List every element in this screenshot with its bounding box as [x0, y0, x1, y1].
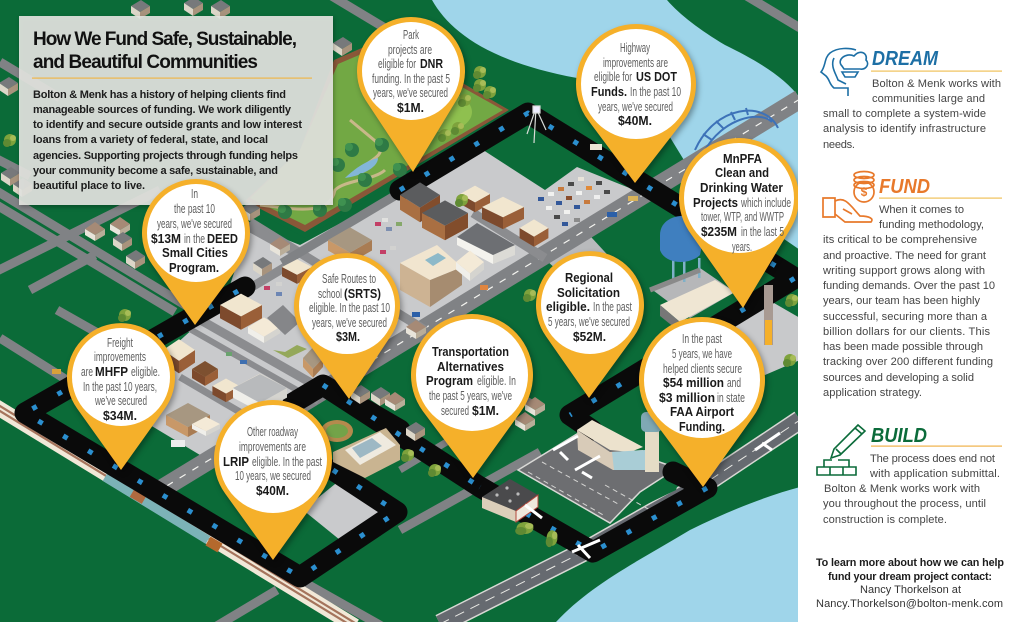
pin: MnPFA: which include — [740, 195, 791, 210]
text: fund: and proactive. The need for grant — [823, 250, 986, 262]
intro title — [33, 29, 297, 73]
pin: Freight MHFP: improvements — [94, 349, 146, 364]
text: fund: successful, securing more than a — [823, 311, 988, 323]
pin: Regional Solicitation: eligible. — [546, 300, 590, 314]
parked cars — [52, 144, 638, 447]
text: dream: Bolton & Menk works with — [872, 78, 1001, 90]
text: dream: needs. — [823, 139, 855, 151]
pin: Transportation Alternatives: Program — [426, 374, 473, 388]
pin: Transportation Alternatives — [411, 314, 533, 478]
pin: Highway US DOT: US DOT — [636, 70, 677, 84]
pin: SRTS — [294, 253, 400, 399]
map background — [0, 0, 800, 622]
pin: DEED Small Cities: the past 10 — [174, 201, 215, 216]
intro text: your community become a safe, sustainable, and — [33, 165, 278, 177]
pin: MnPFA: Projects — [693, 196, 738, 210]
panel: intro — [19, 16, 333, 205]
text: build: with application submittal. — [869, 468, 1000, 480]
contact: To learn more about how we can help — [816, 557, 1004, 569]
text: fund: tracking over 200 different funding — [823, 356, 993, 368]
contact: Nancy Thorkelson at — [860, 584, 961, 596]
text: fund: its critical to be comprehensive — [823, 234, 977, 246]
contact: fund your dream project contact: — [828, 571, 992, 583]
pin: MnPFA: Clean and — [715, 166, 769, 180]
pin: Freight MHFP: are — [81, 364, 93, 379]
school — [321, 420, 400, 478]
railway — [0, 403, 355, 622]
radio tower — [527, 106, 546, 143]
pin: Freight MHFP: we've secured — [94, 393, 147, 408]
water tower — [660, 216, 705, 282]
pin: Regional Solicitation: $52M. — [573, 330, 606, 344]
airport apron — [518, 434, 677, 523]
pin: Park DNR: years, we've secured — [373, 85, 448, 100]
runway — [440, 420, 800, 622]
pin: Freight MHFP: MHFP — [95, 365, 128, 379]
pin: Park DNR: DNR — [420, 57, 443, 71]
pin: SRTS: $3M. — [336, 330, 360, 344]
pin: DEED Small Cities: in the — [184, 231, 205, 246]
pin: MnPFA: $235M — [701, 225, 737, 239]
pin: MnPFA: MnPFA — [723, 152, 762, 166]
pin: SRTS: school — [318, 286, 342, 301]
pin: SRTS: eligible. In the past 10 — [309, 300, 390, 315]
intro text: loans from a variety of federal, state, and local — [33, 134, 268, 146]
pin: Highway US DOT: In the past 10 — [630, 84, 681, 99]
river top — [432, 0, 800, 250]
pin: Park DNR: funding. In the past 5 — [372, 71, 450, 86]
pin: MnPFA: Drinking Water — [700, 181, 783, 195]
pin: LRIP: Other roadway — [247, 424, 298, 439]
pin: Highway US DOT: eligible for — [594, 69, 632, 84]
text: fund — [822, 204, 995, 399]
text: fund: sources and developing a solid — [823, 372, 974, 384]
contact — [816, 557, 1004, 610]
pin: SRTS: Safe Routes to — [322, 271, 376, 286]
pin: Transportation Alternatives: $1M. — [472, 404, 499, 418]
right panel: $ — [861, 185, 868, 199]
airport hangar — [482, 479, 538, 522]
pin: Highway US DOT: improvements are — [603, 55, 668, 70]
pin: LRIP: LRIP — [223, 455, 249, 469]
text: fund: funding methodology, — [879, 219, 984, 231]
planes — [525, 433, 780, 558]
text: fund: application strategy. — [823, 387, 922, 399]
pin: Freight MHFP — [67, 323, 175, 470]
pin: Highway US DOT: Highway — [620, 40, 650, 55]
pin: FAA Airport: $54 million — [663, 376, 724, 390]
pin: SRTS: (SRTS) — [344, 287, 381, 301]
heading: dream: DREAM — [872, 48, 939, 70]
intro text: agencies. Supporting projects through funding helps — [33, 150, 298, 162]
text: build — [823, 453, 1000, 526]
pin: MnPFA: years. — [732, 239, 752, 254]
pin: Transportation Alternatives: secured — [441, 403, 469, 418]
intro text — [33, 89, 302, 192]
pin: FAA Airport: and — [727, 375, 741, 390]
pin: Regional Solicitation: In the past — [593, 299, 632, 314]
pin: Highway US DOT: Funds. — [591, 85, 627, 99]
light grey area right — [700, 295, 800, 375]
contact: Nancy.Thorkelson@bolton-menk.com — [816, 598, 1003, 610]
houses and trees — [0, 0, 798, 477]
pin: Park DNR — [357, 17, 465, 172]
text: build: you throughout the process, until — [823, 498, 986, 510]
pin: Transportation Alternatives: eligible. In — [477, 373, 516, 388]
text: fund: funding demands. Over the past 10 — [823, 280, 995, 292]
text: fund: years, our team has been highly — [823, 295, 980, 307]
pin: FAA Airport: Funding. — [679, 420, 725, 434]
pin: Regional Solicitation: Solicitation — [557, 286, 620, 300]
pin: Park DNR: eligible for — [378, 56, 416, 71]
text: dream: communities large and — [872, 93, 985, 105]
pin: DEED Small Cities: DEED — [207, 232, 238, 246]
pin: LRIP: $40M. — [256, 484, 289, 498]
pin: FAA Airport: $3 million — [659, 391, 715, 405]
intro text: beautiful place to live. — [33, 180, 145, 192]
heading: fund: FUND — [879, 176, 930, 198]
pin: Regional Solicitation: Regional — [565, 271, 613, 285]
pin: MnPFA: tower, WTP, and WWTP — [701, 209, 784, 224]
pin: Freight MHFP: eligible. — [131, 364, 160, 379]
river bottom — [556, 487, 800, 622]
intro title: How We Fund Safe, Sustainable, — [33, 29, 297, 50]
airport terminal — [577, 412, 662, 472]
pin: FAA Airport: helped clients secure — [663, 361, 742, 376]
pin: Park DNR: Park — [403, 27, 419, 42]
text: fund: has been made possible through — [823, 341, 983, 353]
text: fund: When it comes to — [879, 204, 964, 216]
pin: Regional Solicitation: 5 years, we've secured — [548, 314, 630, 329]
pin: LRIP: improvements are — [239, 439, 306, 454]
text: build: Bolton & Menk works work with — [824, 483, 980, 495]
school lot — [303, 480, 387, 540]
pin: LRIP — [214, 400, 332, 560]
pin: DEED Small Cities: In — [191, 186, 198, 201]
intro text: manageable sources of funding. We work diligently — [33, 104, 292, 116]
pin: DEED Small Cities: $13M — [151, 232, 181, 246]
pin: FAA Airport: 5 years, we have — [672, 346, 732, 361]
text: fund: writing support grows along with — [822, 265, 985, 277]
city block — [150, 148, 652, 455]
main avenue — [160, 99, 800, 490]
pin: LRIP: 10 years, we secured — [235, 468, 311, 483]
pin: DEED Small Cities: Small Cities — [162, 246, 228, 260]
pin: Park DNR: projects are — [388, 42, 432, 57]
pin: Highway US DOT — [576, 24, 696, 183]
pin: Park DNR: $1M. — [397, 101, 424, 115]
text: dream: analysis to identify infrastructure — [823, 123, 986, 135]
pin: FAA Airport: FAA Airport — [670, 405, 735, 419]
bridge — [695, 108, 778, 152]
text: fund: billion dollars for our clients. This — [823, 326, 990, 338]
pin: Freight MHFP: In the past 10 years, — [83, 379, 157, 394]
road network — [0, 0, 800, 622]
pin: Freight MHFP: Freight — [107, 335, 133, 350]
industrial building — [650, 270, 735, 332]
intro text: Bolton & Menk has a history of helping clients find — [33, 89, 286, 101]
pin: Regional Solicitation — [536, 251, 644, 398]
heading: build: BUILD — [871, 425, 927, 447]
pin: DEED Small Cities — [142, 179, 250, 325]
text: build: construction is complete. — [823, 514, 947, 526]
silo — [764, 285, 773, 345]
icon: head with cloud — [821, 48, 868, 96]
pin: Transportation Alternatives: the past 5 years, we've — [429, 388, 512, 403]
pin: LRIP: eligible. In the past — [252, 454, 322, 469]
buildings — [163, 182, 780, 558]
city streets — [180, 213, 545, 415]
pin: Freight MHFP: $34M. — [103, 409, 137, 423]
pin: MnPFA — [679, 138, 799, 308]
pin: FAA Airport: in state — [717, 390, 745, 405]
text: dream: small to complete a system-wide — [823, 108, 986, 120]
text: build: The process does end not — [870, 453, 995, 465]
black route — [25, 113, 795, 577]
pin: DEED Small Cities: years, we've secured — [157, 216, 232, 231]
icon: pencil and bricks — [817, 425, 865, 475]
intro text: to identify and secure outside grants and low interest — [33, 119, 302, 131]
park — [240, 33, 513, 238]
right panel — [798, 0, 1024, 622]
pin: Transportation Alternatives: Alternatives — [437, 360, 504, 374]
icon: hand with coins — [823, 172, 874, 222]
pin: MnPFA: in the last 5 — [741, 224, 784, 239]
pin: Transportation Alternatives: Transportation — [432, 345, 509, 359]
pin: Highway US DOT: $40M. — [618, 114, 652, 128]
pin: FAA Airport — [639, 317, 765, 487]
intro title: and Beautiful Communities — [33, 52, 258, 73]
text: dream — [823, 78, 1001, 151]
pin: SRTS: years, we've secured — [312, 315, 387, 330]
pin: DEED Small Cities: Program. — [169, 261, 219, 275]
pin: FAA Airport: In the past — [682, 331, 722, 346]
pin: Highway US DOT: years, we've secured — [598, 99, 673, 114]
